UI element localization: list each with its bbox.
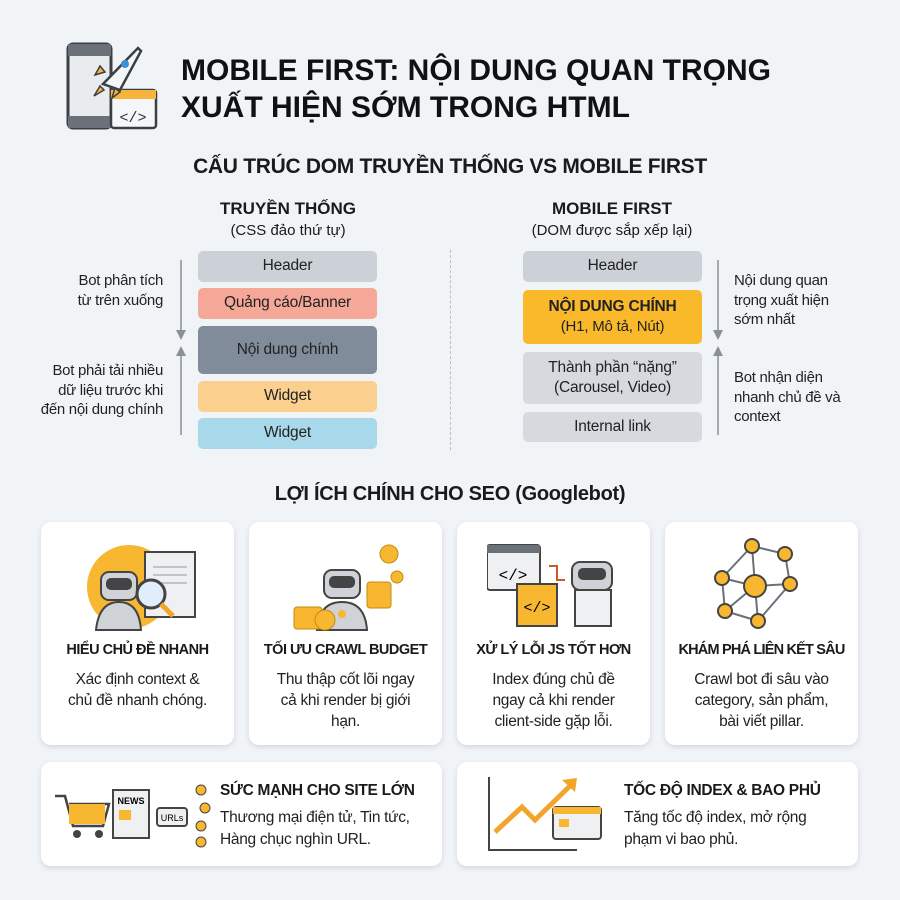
box: main content: [198, 326, 377, 374]
title: [181, 53, 771, 124]
icon: cart news urls: URLs: [161, 813, 184, 823]
note: heavy data: Bot phải tải nhiều dữ liệu trước khi đến nội dung chính: [41, 362, 163, 418]
title: TỐI ƯU CRAWL BUDGET: [264, 642, 427, 658]
icon: network graph: [714, 538, 798, 629]
icon: growth chart: [488, 777, 602, 851]
box: heavy components: (Carousel, Video): [554, 379, 671, 396]
title: XỬ LÝ LỖI JS TỐT HƠN: [476, 642, 631, 658]
box: widget: Widget: [264, 387, 311, 404]
box: heavy components: [523, 352, 702, 404]
desc: [220, 809, 410, 848]
panel: traditional: [41, 199, 377, 449]
title: KHÁM PHÁ LIÊN KẾT SÂU: [678, 642, 845, 658]
section heading: SEO benefits: LỢI ÍCH CHÍNH CHO SEO (Googlebot): [275, 483, 625, 505]
box: widget 2: [198, 418, 377, 449]
card: deep links: [665, 522, 858, 745]
card: crawl budget: [249, 522, 442, 745]
box: header: [523, 251, 702, 282]
desc: Index đúng chủ đề ngay cả khi render client-side gặp lỗi.: [492, 671, 615, 730]
divider: [450, 250, 451, 450]
note: bot recognizes: Bot nhận diện nhanh chủ đề và context: [734, 369, 840, 425]
card: JS errors: [457, 522, 650, 745]
desc: Crawl bot đi sâu vào category, sản phẩm, bài viết pillar.: [694, 671, 829, 730]
header icon: phone with rocket: </>: [119, 110, 147, 127]
mobile first heading: [532, 199, 692, 239]
title: HIỂU CHỦ ĐỀ NHANH: [66, 642, 209, 658]
box: banner: [198, 288, 377, 319]
box: banner: Quảng cáo/Banner: [224, 294, 351, 311]
box: main content: Nội dung chính: [237, 341, 338, 358]
traditional heading: [220, 199, 356, 239]
title: SỨC MẠNH CHO SITE LỚN: [220, 782, 415, 799]
desc: [624, 809, 806, 848]
desc: Tăng tốc độ index, mở rộng: [624, 809, 806, 826]
card: index speed: [457, 762, 858, 866]
box: internal link: [523, 412, 702, 442]
arrows left: [176, 260, 186, 435]
section heading: DOM structure: CẤU TRÚC DOM TRUYỀN THỐNG VS MOBILE FIRST: [193, 155, 707, 178]
card: understand topic: [41, 522, 234, 745]
arrows right: [713, 260, 723, 435]
desc: Xác định context & chủ đề nhanh chóng.: [68, 671, 207, 709]
note: important content first: Nội dung quan trọng xuất hiện sớm nhất: [734, 272, 829, 328]
desc: phạm vi bao phủ.: [624, 831, 738, 848]
box: heavy components: Thành phần “nặng”: [548, 359, 677, 376]
note: top-down: Bot phân tích từ trên xuống: [78, 272, 163, 308]
box: header: [198, 251, 377, 282]
icon: code robot: </>: [523, 600, 551, 617]
mobile first heading: MOBILE FIRST: [552, 199, 672, 218]
box: internal link: Internal link: [574, 418, 651, 435]
icon: robot coins: [294, 544, 404, 631]
panel: mobile first: [523, 199, 841, 442]
icon: cart news urls: NEWS: [118, 796, 144, 806]
desc: Thu thập cốt lõi ngay cả khi render bị giới hạn.: [277, 671, 414, 730]
icon: code robot: </>: [499, 567, 527, 585]
desc: Hàng chục nghìn URL.: [220, 831, 371, 848]
icon: cart news urls: [55, 784, 210, 848]
box: widget: [198, 381, 377, 412]
box: main content: (H1, Mô tả, Nút): [561, 318, 664, 335]
icon: code robot: [487, 544, 613, 627]
traditional heading: (CSS đảo thứ tự): [230, 222, 346, 239]
title: TỐC ĐỘ INDEX & BAO PHỦ: [624, 782, 821, 799]
title: XUẤT HIỆN SỚM TRONG HTML: [181, 91, 630, 124]
header icon: phone with rocket: [66, 42, 158, 130]
box: widget 2: Widget: [264, 424, 311, 441]
desc: Thương mại điện tử, Tin tức,: [220, 809, 410, 826]
card: large sites: [41, 762, 442, 866]
box: main content: NỘI DUNG CHÍNH: [548, 298, 677, 315]
box: header: Header: [263, 257, 312, 274]
title: MOBILE FIRST: NỘI DUNG QUAN TRỌNG: [181, 54, 771, 87]
traditional heading: TRUYỀN THỐNG: [220, 199, 356, 218]
box: header: Header: [588, 257, 637, 274]
icon: robot magnifier: [87, 545, 196, 631]
box: main content: [523, 290, 702, 344]
mobile first heading: (DOM được sắp xếp lại): [532, 222, 692, 239]
